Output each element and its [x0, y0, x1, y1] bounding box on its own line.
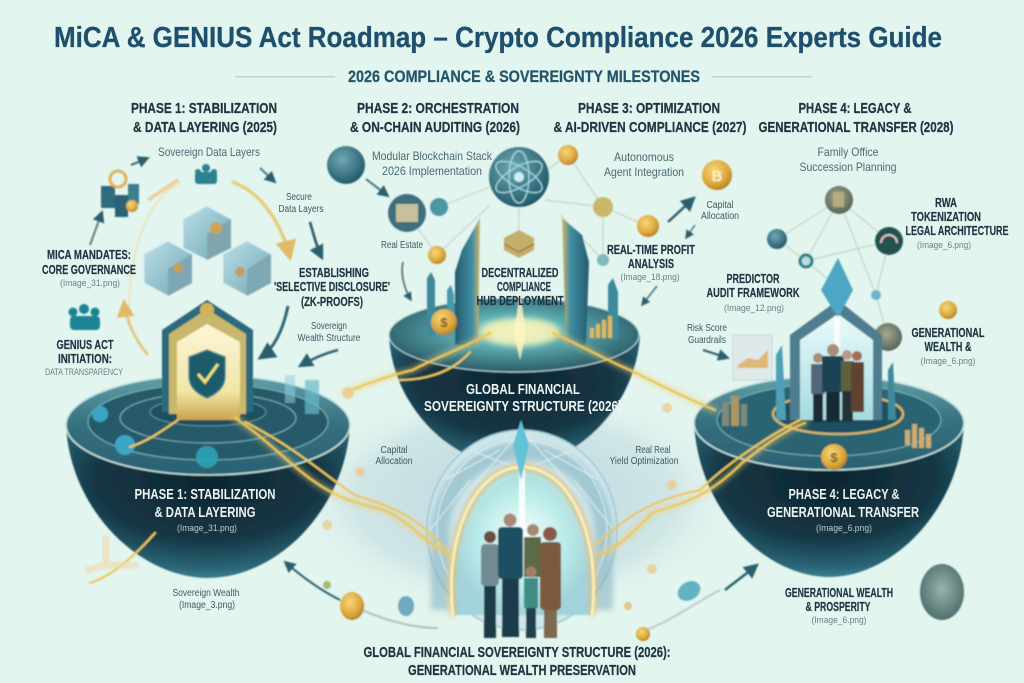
caption: global financial sovereignty structure [364, 644, 670, 679]
label: secure data layers: Data Layers [278, 204, 324, 215]
label: family office: Family Office [818, 145, 879, 159]
icon: small teal node right [597, 254, 609, 266]
label: sovereign data layers: Sovereign Data Layers [158, 145, 260, 159]
label: genius act: DATA TRANSPARENCY [45, 367, 123, 378]
icon: real estate bank [388, 194, 426, 232]
label: sovereign wealth: Sovereign Wealth [172, 588, 240, 599]
label: genius act [45, 338, 123, 378]
icon: right tower [562, 218, 618, 345]
label: rwa tokenization: RWA [935, 196, 957, 210]
label: phase 4 on bowl: GENERATIONAL TRANSFER [767, 505, 919, 521]
label: capital allocation lower [376, 445, 412, 467]
label: mica mandates: CORE GOVERNANCE [42, 263, 136, 277]
caption: global financial sovereignty structure: GLOBAL FINANCIAL SOVEREIGNTY STRUCTURE (2026): [364, 644, 670, 661]
label: generational wealth and prosperity: & PROSPERITY [806, 600, 871, 614]
subtitle: 2026 COMPLIANCE & SOVEREIGNTY MILESTONES [348, 68, 700, 86]
heading: phase 4 [758, 100, 954, 136]
label: autonomous agent integration [604, 150, 684, 179]
icon: data cube right [223, 241, 271, 296]
central haze [290, 385, 740, 615]
icon: generational gold [939, 301, 957, 319]
label: mica mandates: (Image_31.png) [60, 278, 120, 289]
icon: data cube left [144, 241, 192, 296]
icon: atom sphere [489, 147, 549, 207]
label: autonomous agent integration: Agent Integration [604, 165, 684, 179]
label: modular blockchain stack [372, 149, 493, 178]
label: capital allocation top: Capital [706, 200, 734, 211]
icon: teal ring node [800, 255, 812, 267]
label: risk score guardrails [687, 323, 727, 346]
label: decentralized compliance hub: DECENTRALIZED [482, 266, 558, 280]
label: rwa tokenization: (Image_6.png) [917, 240, 971, 251]
heading: phase 3 [554, 100, 747, 136]
label: sovereign wealth structure [298, 321, 361, 344]
label: phase 1 on bowl [134, 487, 276, 534]
golden energy streams [88, 333, 805, 583]
label: predictor audit framework: PREDICTOR [726, 272, 780, 286]
label: secure data layers [278, 192, 324, 215]
network lines [407, 155, 648, 260]
icon: teal node left [767, 229, 787, 249]
label: predictor audit framework: (Image_12.png) [724, 303, 784, 314]
label: modular blockchain stack: Modular Blockchain Stack [372, 149, 493, 163]
label: selective disclosure: ESTABLISHING [299, 266, 369, 280]
icon: dollar coin on bowl: $ [440, 315, 448, 330]
panel: left bowl [66, 375, 350, 578]
icon: green gold node [874, 323, 902, 351]
label: generational wealth and prosperity: (Image_6.png) [812, 615, 866, 626]
heading: phase 1 [131, 100, 277, 136]
heading: phase 4: GENERATIONAL TRANSFER (2028) [758, 119, 954, 136]
icon: bars left [722, 396, 747, 426]
icon: gold bars right [905, 424, 931, 448]
icon: dollar coin on bowl [431, 309, 457, 335]
icon: family at crystal house [811, 344, 864, 422]
label: phase 4 on bowl [767, 487, 919, 534]
icon: rwa gauge [875, 227, 903, 255]
label: generational wealth: GENERATIONAL [912, 326, 985, 340]
heading: phase 2: & ON-CHAIN AUDITING (2026) [350, 119, 520, 136]
label: capital allocation lower: Capital [380, 445, 408, 456]
label: rwa tokenization [906, 196, 1008, 251]
label: phase 4 on bowl: (Image_6.png) [816, 523, 872, 534]
label: yield optimization: Real Real [636, 445, 670, 456]
icon: orbit coins right [624, 565, 757, 641]
icon: family figures [481, 514, 561, 638]
network lines [777, 200, 889, 337]
label: real-time profit analysis: ANALYSIS [628, 257, 674, 271]
icon: dollar coin: $ [830, 450, 838, 465]
icon: moon [920, 564, 964, 620]
label: sovereign wealth [172, 588, 240, 611]
label: real-time profit analysis: (Image_18.png) [620, 272, 680, 283]
label: decentralized compliance hub: COMPLIANCE [497, 280, 551, 294]
label: yield optimization: Yield Optimization [610, 456, 678, 467]
label: phase 4 on bowl: PHASE 4: LEGACY & [788, 487, 900, 503]
label: global financial sovereignty on bowl [424, 382, 622, 415]
label: sovereign wealth structure: Sovereign [311, 321, 347, 332]
label: generational wealth: WEALTH & [924, 340, 972, 354]
heading: phase 3: PHASE 3: OPTIMIZATION [578, 100, 720, 117]
label: capital allocation top [701, 200, 739, 222]
label: real-time profit analysis [607, 243, 695, 283]
icon: left tower [427, 218, 480, 345]
icon: succession node [825, 186, 853, 214]
caption: global financial sovereignty structure: GENERATIONAL WEALTH PRESERVATION [408, 662, 636, 679]
label: generational wealth: (Image_6.png) [920, 356, 976, 367]
icon: genius act people [68, 304, 100, 330]
artwork: all drawn illustration [66, 145, 964, 641]
label: selective disclosure [274, 266, 390, 309]
label: selective disclosure: (ZK-PROOFS) [301, 295, 363, 309]
icon: gold node [593, 197, 613, 217]
label: secure data layers: Secure [286, 192, 312, 203]
label: rwa tokenization: TOKENIZATION [911, 210, 981, 224]
label: capital allocation top: Allocation [701, 211, 739, 222]
heading: phase 4: PHASE 4: LEGACY & [798, 100, 912, 117]
heading: phase 1: PHASE 1: STABILIZATION [131, 100, 277, 117]
label: mica mandates [42, 248, 136, 289]
icon: bitcoin coin [702, 160, 732, 190]
label: mica mandates: MICA MANDATES: [47, 248, 131, 262]
label: modular blockchain stack: 2026 Implementation [382, 164, 482, 178]
icon: profit coin [637, 215, 659, 237]
label: generational wealth and prosperity [785, 586, 893, 626]
label: global financial sovereignty on bowl: SOVEREIGNTY STRUCTURE (2026) [424, 399, 622, 415]
label: autonomous agent integration: Autonomous [614, 150, 674, 164]
icon: data cube top [183, 206, 231, 260]
label: sovereign wealth structure: Wealth Structure [298, 333, 361, 344]
icon: bitcoin coin: B [712, 168, 723, 185]
icon: orbit coins left [285, 562, 438, 628]
panel: phase 4 network and crystal house [703, 186, 957, 422]
icon: compliance box stack [504, 230, 534, 258]
icon: coin top [558, 145, 578, 165]
heading: phase 3: & AI-DRIVEN COMPLIANCE (2027) [554, 119, 747, 136]
label: predictor audit framework [706, 272, 800, 314]
panel: right bowl [694, 376, 964, 577]
label: risk score guardrails: Guardrails [688, 335, 726, 346]
icon: sovereign data people [195, 164, 217, 184]
glow spots [322, 387, 677, 574]
icon: risk chart panel [703, 335, 772, 380]
panel: centre globe with family [427, 420, 617, 638]
label: capital allocation lower: Allocation [376, 456, 412, 467]
label: yield optimization [610, 445, 678, 467]
icon: small blue node [871, 290, 881, 300]
label: real estate: Real Estate [381, 240, 423, 251]
label: phase 1 on bowl: PHASE 1: STABILIZATION [134, 487, 276, 503]
label: predictor audit framework: AUDIT FRAMEWORK [706, 286, 800, 300]
panel: phase 1 cycle diagram [68, 158, 338, 366]
icon: dollar coin [821, 444, 847, 470]
arcs around the cubes [90, 158, 338, 366]
icon: shield gateway [162, 300, 253, 420]
heading: phase 1: & DATA LAYERING (2025) [133, 119, 277, 136]
label: generational wealth and prosperity: GENERATIONAL WEALTH [785, 586, 893, 600]
label: real-time profit analysis: REAL-TIME PROFIT [607, 243, 695, 257]
label: phase 1 on bowl: (Image_31.png) [177, 523, 237, 534]
label: family office: Succession Planning [800, 160, 896, 174]
icon: mica cluster [101, 171, 139, 217]
label: phase 1 on bowl: & DATA LAYERING [154, 505, 256, 521]
label: generational wealth [912, 326, 985, 367]
icon: small gold node [428, 246, 446, 264]
heading: phase 2 [350, 100, 520, 136]
label: risk score guardrails: Risk Score [687, 323, 727, 334]
label: genius act: INITIATION: [58, 352, 112, 366]
icon: crystal house [776, 258, 896, 420]
label: decentralized compliance hub [476, 266, 564, 308]
icon: modular stack [327, 146, 365, 184]
icon: small teal node [430, 198, 448, 216]
label: decentralized compliance hub: HUB DEPLOYMENT [476, 294, 564, 308]
heading: phase 2: PHASE 2: ORCHESTRATION [357, 100, 519, 117]
label: global financial sovereignty on bowl: GLOBAL FINANCIAL [466, 382, 580, 398]
panel: phase 2 and 3 network [327, 145, 732, 345]
label: sovereign wealth: (Image_3.png) [179, 600, 235, 611]
title: MiCA & GENIUS Act Roadmap – Crypto Compliance 2026 Experts Guide [54, 22, 942, 54]
label: family office [800, 145, 896, 174]
panel: upper centre bowl [389, 290, 640, 466]
icon: gold bar chart [590, 316, 612, 338]
label: genius act: GENIUS ACT [56, 338, 114, 352]
label: selective disclosure: 'SELECTIVE DISCLOSURE' [274, 280, 390, 294]
